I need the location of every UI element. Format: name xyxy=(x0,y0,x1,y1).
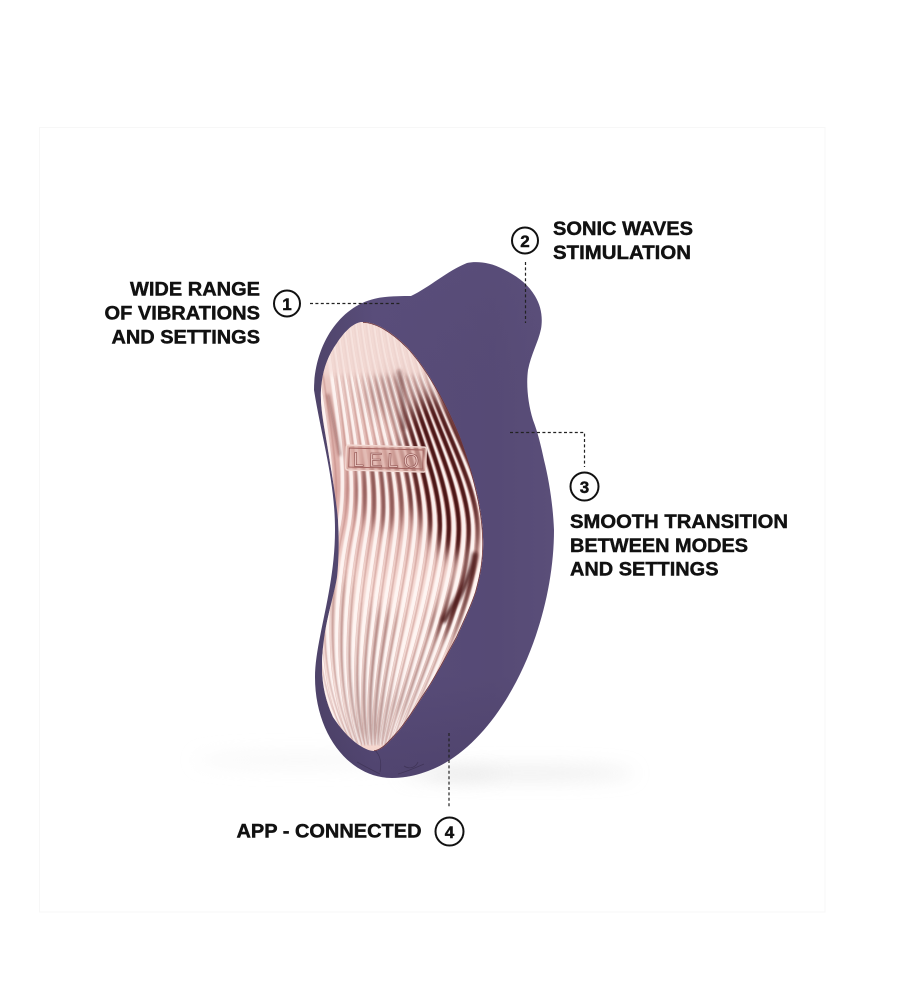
logo plate xyxy=(346,445,426,473)
label 4: APP - CONNECTED xyxy=(236,822,422,842)
leader line 2 xyxy=(524,262,526,323)
label 3 xyxy=(570,512,788,580)
badge 3 xyxy=(570,472,598,500)
label 1: AND SETTINGS xyxy=(112,328,260,348)
label 1: WIDE RANGE xyxy=(130,280,260,300)
top soft reflection xyxy=(322,318,425,375)
badge 2 xyxy=(512,228,538,254)
logo plate: LELO xyxy=(353,449,419,473)
badge 1: 1 xyxy=(282,295,292,314)
dark reflections xyxy=(328,372,475,620)
callout 3: smooth transition xyxy=(510,432,788,580)
badge 3: 3 xyxy=(580,478,589,497)
label 2: SONIC WAVES xyxy=(553,219,693,240)
floor shadow xyxy=(195,753,635,780)
badge 2: 2 xyxy=(520,232,530,251)
badge 4: 4 xyxy=(445,823,455,842)
dark ridge reflections xyxy=(325,371,480,745)
callout 2: sonic waves xyxy=(512,219,693,323)
engraved controls xyxy=(357,748,424,774)
device body xyxy=(314,262,554,778)
callout 4: app connected xyxy=(236,733,464,846)
label 3: BETWEEN MODES xyxy=(570,536,748,557)
label 3: AND SETTINGS xyxy=(570,560,718,580)
leader line 4 xyxy=(448,733,450,808)
leader line 1 xyxy=(310,302,401,304)
label 1 xyxy=(104,280,260,348)
leader line 3 xyxy=(510,432,584,467)
badge 4 xyxy=(436,818,464,846)
label 2: STIMULATION xyxy=(553,243,691,264)
label 2 xyxy=(553,219,693,264)
callout 1: wide range of vibrations xyxy=(104,280,401,348)
panel ridges xyxy=(320,322,484,746)
dark panel edge xyxy=(363,322,483,751)
label 3: SMOOTH TRANSITION xyxy=(570,512,788,533)
metallic rose panel xyxy=(320,322,484,751)
product illustration xyxy=(300,262,554,778)
label 1: OF VIBRATIONS xyxy=(104,304,260,324)
badge 1 xyxy=(274,290,300,316)
